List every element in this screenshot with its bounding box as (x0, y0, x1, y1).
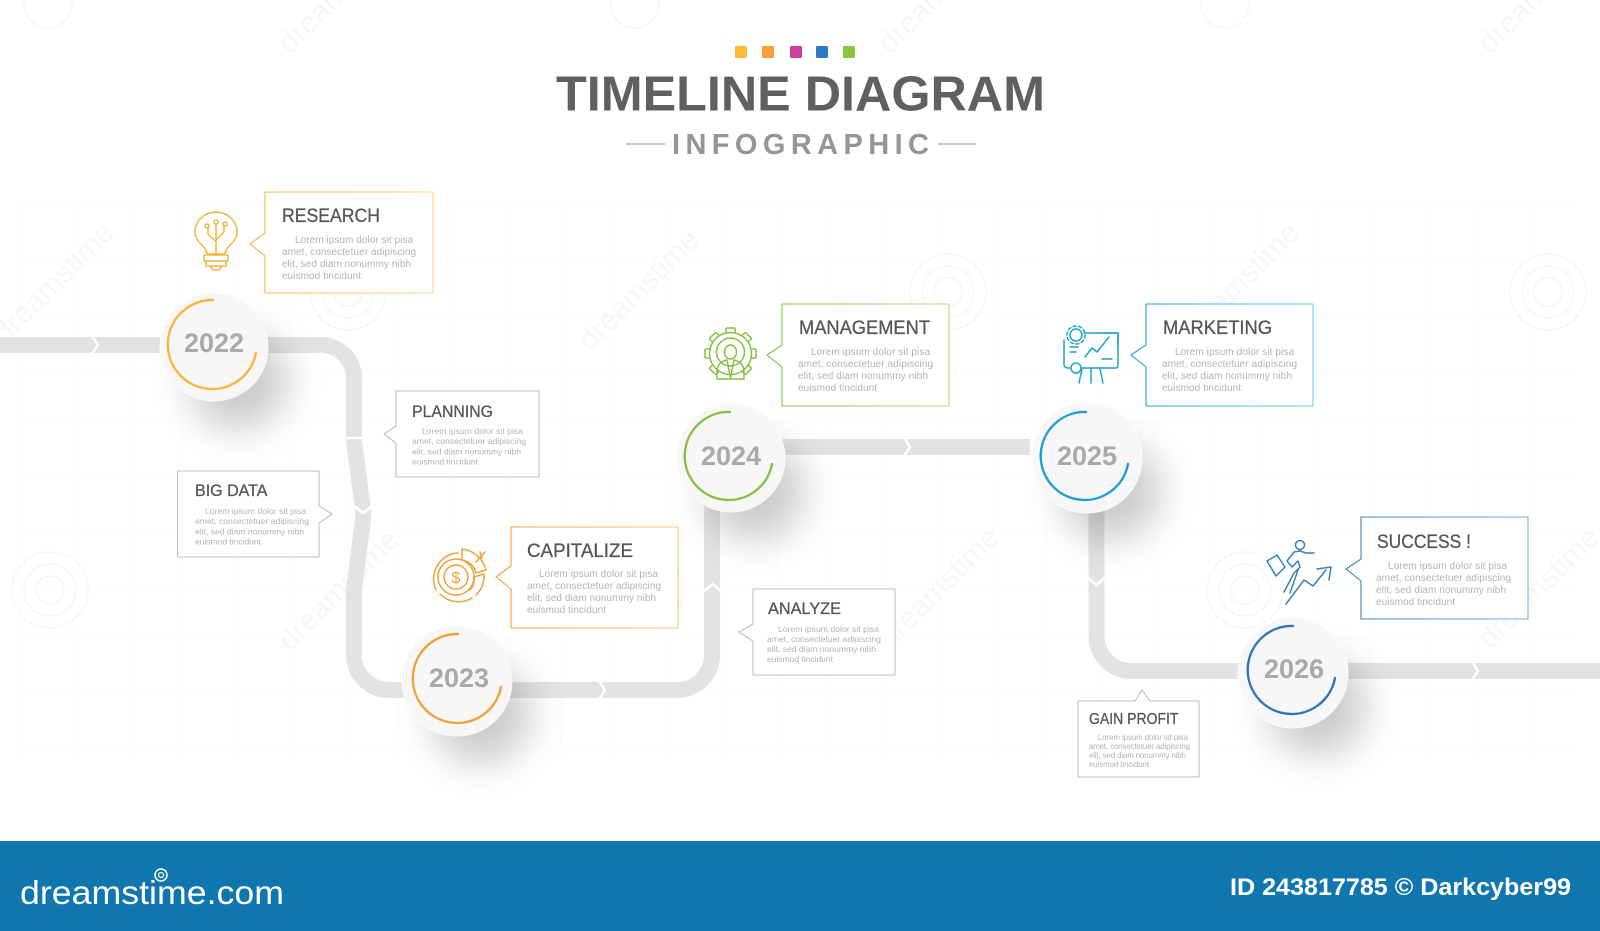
panel: marketing: amet, consectetuer adipiscing (1162, 359, 1297, 370)
panel: big data: euismod tincidunt (195, 536, 262, 546)
panel: success: euismod tincidunt (1376, 597, 1455, 608)
panel: gain profit: elit, sed diam nonummy nibh (1089, 751, 1186, 760)
panel: capitalize: euismod tincidunt (527, 605, 606, 616)
panel: planning: amet, consectetuer adipiscing (412, 436, 526, 446)
panel: success (1346, 517, 1528, 619)
panel: success: amet, consectetuer adipiscing (1376, 573, 1511, 584)
panel: management: elit, sed diam nonummy nibh (798, 371, 928, 382)
panel: analyze: ANALYZE (768, 599, 841, 618)
panel: capitalize: amet, consectetuer adipiscing (527, 581, 661, 592)
panel: research: elit, sed diam nonummy nibh (282, 259, 411, 270)
colour squares (735, 46, 855, 58)
watermarks (0, 0, 1600, 657)
panel: big data: elit, sed diam nonummy nibh (195, 526, 304, 536)
panel: analyze: amet, consectetuer adipiscing (767, 634, 881, 644)
panel: research: Lorem ipsum dolor sit pisa (295, 235, 413, 246)
icon: target money: $ (452, 570, 461, 587)
panel: capitalize: CAPITALIZE (527, 540, 633, 562)
panel: planning: euismod tincidunt (412, 456, 479, 466)
image id credit: ID 243817785 © Darkcyber99 (1230, 874, 1571, 901)
milestone 2023 (402, 626, 531, 764)
panel: gain profit: GAIN PROFIT (1089, 711, 1179, 728)
watermarks: dreamstime (872, 521, 1006, 655)
panel: planning: elit, sed diam nonummy nibh (412, 446, 521, 456)
panel: analyze: Lorem ipsum dolor sit pisa (778, 624, 879, 634)
panel: marketing: MARKETING (1163, 317, 1272, 339)
milestone 2022 (160, 293, 288, 430)
panel: marketing: elit, sed diam nonummy nibh (1162, 371, 1292, 382)
milestone 2025 (1032, 403, 1161, 541)
icon: light bulb (195, 212, 237, 270)
panel: planning (384, 391, 539, 477)
panel: planning: PLANNING (412, 402, 493, 421)
panel: research: euismod tincidunt (282, 271, 361, 282)
panel: analyze: elit, sed diam nonummy nibh (767, 644, 876, 654)
panel: management: euismod tincidunt (798, 383, 877, 394)
background grid (20, 206, 1580, 758)
icon: running businessman (1267, 540, 1331, 604)
panel: analyze (739, 589, 895, 675)
panel: big data (178, 471, 332, 557)
icon: gear with person (705, 328, 756, 379)
panel: management: amet, consectetuer adipiscing (798, 359, 933, 370)
milestone 2025: 2025 (1057, 441, 1117, 471)
timeline track (0, 336, 1600, 700)
panel: planning: Lorem ipsum dolor sit pisa (422, 426, 523, 436)
icon: presentation board (1064, 326, 1118, 383)
footer bar (0, 841, 1600, 931)
panel: marketing: Lorem ipsum dolor sit pisa (1175, 347, 1294, 358)
panel: management: MANAGEMENT (799, 317, 930, 339)
panel: big data: BIG DATA (195, 481, 268, 500)
panel: gain profit: Lorem ipsum dolor sit pisa (1098, 733, 1189, 742)
panel: capitalize (496, 527, 678, 628)
panel: gain profit: amet, consectetuer adipiscing (1089, 742, 1190, 751)
panel: capitalize: elit, sed diam nonummy nibh (527, 593, 656, 604)
panel: big data: amet, consectetuer adipiscing (195, 516, 309, 526)
panel: research (250, 192, 433, 293)
logo: dreamstime.com (20, 874, 284, 911)
milestone 2022: 2022 (184, 328, 244, 358)
panel: analyze: euismod tincidunt (767, 654, 834, 664)
panel: capitalize: Lorem ipsum dolor sit pisa (539, 569, 658, 580)
watermarks: dreamstime (272, 523, 406, 657)
panel: marketing (1131, 304, 1313, 406)
subtitle: INFOGRAPHIC (672, 129, 929, 161)
milestone 2024: 2024 (701, 441, 761, 471)
panel: success: Lorem ipsum dolor sit pisa (1388, 561, 1507, 572)
milestone 2026 (1238, 618, 1367, 756)
milestone 2023: 2023 (429, 663, 489, 693)
panel: management: Lorem ipsum dolor sit pisa (811, 347, 930, 358)
panel: management (767, 304, 949, 406)
title: TIMELINE DIAGRAM (556, 68, 1045, 122)
panel: success: SUCCESS ! (1377, 531, 1471, 553)
panel: success: elit, sed diam nonummy nibh (1376, 585, 1506, 596)
watermarks: dreamstime (572, 223, 706, 357)
panel: gain profit: euismod tincidunt (1089, 760, 1150, 769)
panel: research: RESEARCH (282, 205, 380, 227)
milestone 2026: 2026 (1264, 654, 1324, 684)
panel: marketing: euismod tincidunt (1162, 383, 1241, 394)
panel: gain profit (1078, 690, 1199, 777)
panel: big data: Lorem ipsum dolor sit pisa (205, 506, 306, 516)
panel: research: amet, consectetuer adipiscing (282, 247, 416, 258)
icon: target money (434, 549, 486, 602)
milestone 2024 (677, 404, 805, 541)
watermarks: dreamstime (1172, 216, 1306, 350)
